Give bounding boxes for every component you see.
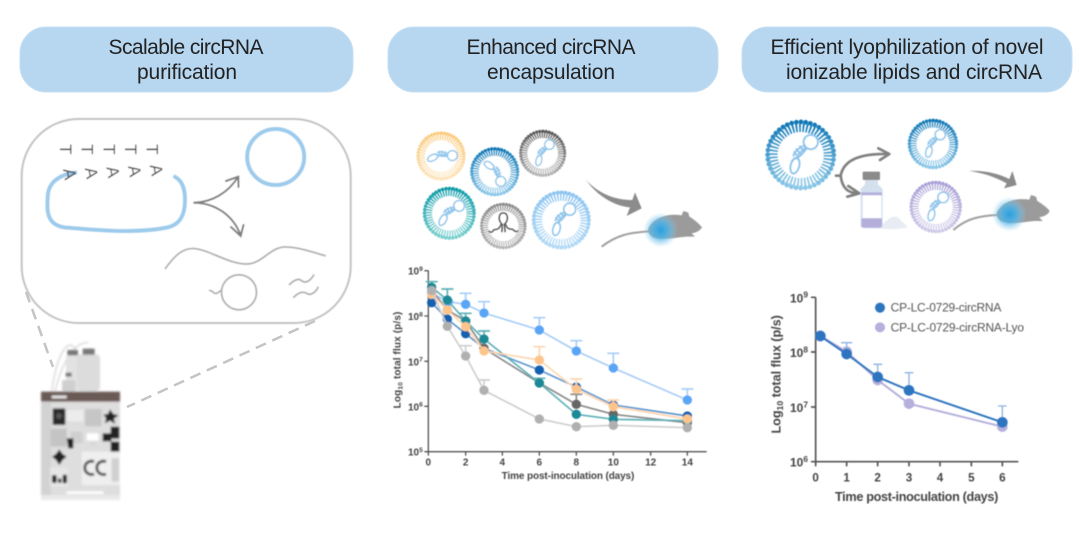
oligo-dT labels — [56, 144, 162, 154]
y tick labels: 6 — [803, 454, 808, 464]
y tick labels: 9 — [803, 290, 808, 300]
panel: lyophilization illustration — [768, 120, 1050, 232]
arrows: split to direct and vial — [836, 148, 889, 197]
x tick labels: 0 — [426, 457, 432, 468]
poly-A labels: A — [102, 165, 123, 180]
legend — [875, 301, 1024, 334]
oligo-dT labels: T — [121, 144, 140, 154]
y tick labels: 9 — [419, 266, 423, 273]
x tick labels — [812, 472, 1006, 485]
oligo-dT labels: T — [143, 144, 162, 154]
series: teal — [426, 282, 692, 425]
x tick labels: 1 — [843, 472, 850, 485]
heading pill: scalable circRNA purification: Scalable circRNA — [108, 36, 264, 59]
poly-A labels — [59, 163, 167, 182]
particle: large blue LNP — [768, 122, 834, 188]
particle: purple LNP — [911, 182, 960, 232]
arrow: to mouse — [586, 180, 642, 216]
y axis title: Log — [770, 410, 784, 433]
heading pill: enhanced circRNA encapsulation: Enhanced circRNA — [466, 36, 636, 59]
heading pill: scalable circRNA purification: purification — [137, 61, 237, 84]
heading pill: efficient lyophilization: Efficient lyophilization of novel — [770, 36, 1044, 59]
x tick labels: 12 — [645, 457, 657, 468]
poly-A labels: A — [59, 167, 80, 182]
series: light blue — [427, 289, 693, 405]
legend: CP-LC-0729-circRNA-Lyo — [891, 320, 1024, 334]
heading pill: efficient lyophilization: ionizable lipids and circRNA — [786, 61, 1042, 84]
y axis title: 10 — [397, 382, 404, 390]
x tick labels: 6 — [999, 472, 1006, 485]
oligo-dT labels: T — [56, 144, 75, 154]
heading pill: efficient lyophilization — [742, 27, 1072, 92]
series: non-lyophilized — [815, 331, 1008, 428]
series: light grey — [427, 286, 692, 432]
x tick labels: 8 — [574, 457, 580, 468]
y axis title: Log — [392, 390, 403, 408]
y axis title: total flux (p/s) — [770, 315, 784, 401]
poly-A labels: A — [81, 166, 102, 181]
oligo-dT labels: T — [99, 144, 118, 154]
particle: blue LNP after lyophilization — [909, 120, 957, 168]
x tick labels: 0 — [812, 472, 819, 485]
particle: orange LNP — [418, 133, 464, 179]
series: orange — [427, 290, 692, 424]
x tick labels: 2 — [463, 457, 469, 468]
x tick labels: 6 — [537, 457, 543, 468]
dashed zoom lines to instrument — [26, 292, 315, 407]
y tick labels: 10 — [408, 267, 419, 278]
particle: teal LNP — [424, 188, 474, 238]
x tick labels: 4 — [937, 472, 944, 485]
arrow: to mouse — [969, 171, 1017, 188]
y tick labels: 10 — [790, 401, 803, 415]
x tick labels — [426, 457, 693, 468]
axes — [811, 297, 1018, 466]
y tick labels — [790, 290, 808, 470]
series: dark blue — [427, 298, 692, 421]
icon: chromatography instrument — [41, 343, 120, 500]
y tick labels: 10 — [408, 312, 419, 323]
y axis title: total flux (p/s) — [392, 312, 403, 382]
poly-A tailed precursor loop — [47, 172, 185, 231]
y tick labels: 8 — [803, 344, 808, 354]
y tick labels: 10 — [408, 448, 419, 459]
oligo-dT labels: T — [78, 144, 97, 154]
particle: grey LNP with linear RNA — [481, 204, 525, 248]
x tick labels: 2 — [874, 472, 881, 485]
y tick labels: 8 — [419, 311, 423, 318]
y tick labels: 10 — [408, 357, 419, 368]
axes — [424, 271, 707, 456]
x axis title: Time post-inoculation (days) — [835, 490, 998, 504]
x tick labels: 5 — [968, 472, 975, 485]
particle: blue LNP — [472, 149, 518, 195]
y tick labels: 10 — [790, 291, 803, 305]
x tick labels: 3 — [906, 472, 913, 485]
y tick labels: 5 — [419, 447, 423, 454]
impurities: linear RNA — [165, 247, 326, 269]
particle: dark grey LNP — [521, 131, 565, 175]
heading pill: scalable circRNA purification — [20, 27, 353, 92]
y tick labels: 10 — [790, 346, 803, 360]
legend: CP-LC-0729-circRNA — [891, 301, 1001, 315]
chart: total flux after lyophilization — [770, 290, 1024, 504]
heading pill: enhanced circRNA encapsulation: encapsulation — [487, 61, 615, 84]
y tick labels: 10 — [790, 456, 803, 470]
heading pill: enhanced circRNA encapsulation — [388, 27, 718, 92]
y tick labels — [408, 266, 423, 459]
y tick labels: 6 — [419, 402, 423, 409]
y axis title: 10 — [775, 401, 785, 410]
y tick labels: 10 — [408, 402, 419, 413]
panel: encapsulation illustration — [418, 131, 702, 248]
panel: purification zoom box — [22, 119, 351, 323]
poly-A labels: A — [124, 164, 145, 179]
x tick labels: 14 — [682, 457, 693, 468]
icon: mouse with luminescence — [602, 211, 702, 247]
x axis title: Time post-inoculation (days) — [502, 471, 634, 482]
x tick labels: 4 — [500, 457, 506, 468]
icon: mouse with luminescence — [953, 195, 1050, 232]
x tick labels: 10 — [608, 457, 619, 468]
branching arrows — [194, 177, 244, 236]
series: dark grey — [432, 290, 692, 427]
chart: total flux over time, six formulations — [392, 266, 707, 482]
y tick labels: 7 — [803, 399, 808, 409]
impurities: fragments — [289, 274, 318, 298]
poly-A labels: A — [146, 163, 167, 178]
series: lyophilized — [815, 331, 1008, 432]
impurities: tailed circle — [209, 275, 256, 310]
purified circular RNA — [247, 129, 304, 185]
icon: vial with powder — [861, 172, 907, 229]
y tick labels: 7 — [419, 357, 423, 364]
particle: light blue LNP — [534, 192, 589, 248]
